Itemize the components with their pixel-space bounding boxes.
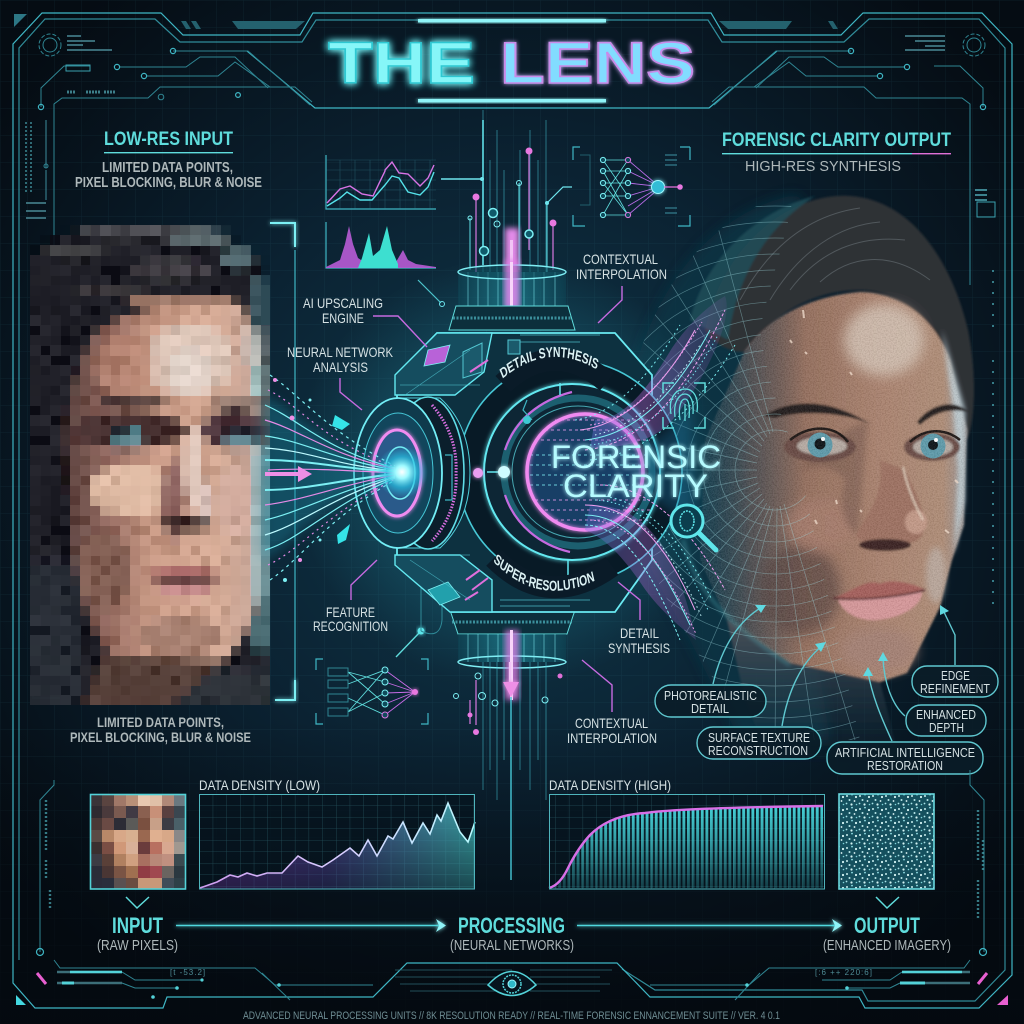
caption under low-res face — [70, 714, 251, 745]
label: detail synthesis — [608, 582, 670, 656]
title — [328, 19, 695, 102]
forensic clarity title — [551, 439, 721, 504]
top left circuit traces — [26, 34, 312, 330]
title: LENS — [500, 31, 695, 96]
heading: forensic clarity output: HIGH-RES SYNTHESIS — [745, 158, 901, 175]
stage: processing: PROCESSING — [458, 913, 565, 938]
line chart small — [326, 155, 436, 209]
stage: output: (ENHANCED IMAGERY) — [823, 937, 951, 954]
footer text: ADVANCED NEURAL PROCESSING UNITS // 8K RESOLUTION READY // REAL-TIME FORENSIC ENNANCEMENT SUITE // VER. 4 0.1 — [243, 1010, 780, 1022]
title: THE — [328, 31, 475, 96]
chart: data density high: DATA DENSITY (HIGH) — [549, 777, 671, 793]
label: detail synthesis: DETAIL — [620, 625, 659, 641]
bottom hud details — [36, 770, 986, 1000]
left lens — [397, 398, 470, 548]
heading: forensic clarity output: FORENSIC CLARITY OUTPUT — [722, 130, 951, 151]
label: ai upscaling engine: AI UPSCALING — [303, 295, 383, 311]
central lens device — [327, 258, 697, 704]
label: feature recognition: RECOGNITION — [313, 618, 388, 634]
left bracket for pixel face — [33, 223, 295, 700]
callout: surface texture reconstruction: SURFACE TEXTURE — [708, 730, 810, 745]
callout: artificial intelligence restoration: ARTIFICIAL INTELLIGENCE — [835, 745, 975, 760]
label: contextual interpolation top — [576, 251, 667, 323]
output texture thumbnail — [839, 794, 934, 889]
callout: photorealistic detail: DETAIL — [691, 701, 729, 716]
callout: artificial intelligence restoration — [827, 667, 983, 774]
stage: processing: (NEURAL NETWORKS) — [450, 937, 574, 954]
ring label bottom: SUPER-RESOLUTION — [494, 554, 594, 591]
stage: input — [97, 897, 178, 954]
label: feature recognition: FEATURE — [326, 604, 375, 620]
stage: input: (RAW PIXELS) — [97, 937, 178, 954]
arrow: processing to output — [577, 919, 842, 932]
stage: output — [823, 897, 951, 954]
octagon body — [397, 333, 652, 612]
icon: fingerprint — [663, 383, 705, 428]
heading: low-res input: LOW-RES INPUT — [104, 129, 233, 150]
output data stream — [575, 296, 735, 640]
heading: low-res input: PIXEL BLOCKING, BLUR & NOISE — [75, 174, 262, 191]
callout: photorealistic detail — [655, 605, 766, 717]
label: neural network analysis: NEURAL NETWORK — [287, 344, 394, 360]
high-res face — [651, 195, 975, 746]
label: contextual interpolation top: INTERPOLATION — [576, 266, 667, 282]
chart: data density high — [549, 777, 825, 889]
icon: magnifier — [671, 505, 716, 550]
central beam — [400, 466, 610, 478]
callout: edge refinement: REFINEMENT — [920, 681, 990, 696]
label: neural network analysis — [287, 344, 394, 410]
label: ai upscaling engine: ENGINE — [322, 310, 364, 326]
bottom tube — [450, 610, 575, 700]
label: ai upscaling engine — [303, 295, 427, 347]
bottom hud details: [:6 ++ 220:6] — [815, 968, 873, 977]
chart: data density low — [199, 777, 475, 889]
wireframe mesh — [643, 206, 860, 740]
low-res pixelated face — [30, 225, 270, 705]
network panel bottom left — [316, 580, 442, 724]
label: contextual interpolation bottom — [567, 660, 657, 746]
vertical energy beams top — [441, 110, 572, 310]
right ring — [458, 360, 682, 584]
callout: enhanced depth: ENHANCED — [916, 707, 976, 722]
top tube — [449, 260, 575, 330]
label: neural network analysis: ANALYSIS — [313, 359, 368, 375]
callout: surface texture reconstruction — [697, 642, 826, 759]
callout: enhanced depth — [878, 652, 986, 736]
label: contextual interpolation top: CONTEXTUAL — [583, 251, 658, 267]
input data stream — [262, 375, 428, 582]
forensic clarity title: CLARITY — [563, 468, 708, 504]
network panel top right — [573, 147, 690, 226]
caption under low-res face: PIXEL BLOCKING, BLUR & NOISE — [70, 729, 251, 745]
label: detail synthesis: SYNTHESIS — [608, 640, 670, 656]
callout: edge refinement: EDGE — [941, 668, 970, 683]
stage: output: OUTPUT — [854, 913, 920, 938]
label: contextual interpolation bottom: CONTEXTUAL — [575, 715, 648, 731]
heading: forensic clarity output — [722, 130, 951, 175]
forensic clarity title: FORENSIC — [551, 439, 721, 475]
caption under low-res face: LIMITED DATA POINTS, — [97, 714, 224, 730]
bottom hud details: [t -53.2] — [170, 968, 206, 977]
histogram small — [326, 222, 444, 306]
label: contextual interpolation bottom: INTERPOLATION — [567, 730, 657, 746]
callout: artificial intelligence restoration: RESTORATION — [867, 758, 943, 773]
label: feature recognition — [313, 560, 388, 634]
stage: processing — [450, 913, 574, 954]
input thumbnail — [90, 794, 186, 889]
icon: eye emblem — [488, 972, 536, 996]
heading: low-res input: LIMITED DATA POINTS, — [102, 159, 233, 176]
heading: low-res input — [75, 129, 262, 191]
callout: enhanced depth: DEPTH — [929, 720, 964, 735]
ring label backing — [503, 360, 607, 384]
arrow: input to processing — [176, 919, 446, 932]
vertical energy beams bottom — [454, 662, 562, 880]
ring label top: DETAIL SYNTHESIS — [499, 346, 598, 378]
chart: data density low: DATA DENSITY (LOW) — [199, 777, 320, 793]
top right circuit traces — [712, 34, 995, 610]
callout: surface texture reconstruction: RECONSTRUCTION — [708, 743, 808, 758]
callout: photorealistic detail: PHOTOREALISTIC — [664, 688, 757, 703]
ring label backing lower — [494, 558, 612, 587]
callout: edge refinement — [912, 605, 998, 697]
stage: input: INPUT — [112, 913, 163, 938]
